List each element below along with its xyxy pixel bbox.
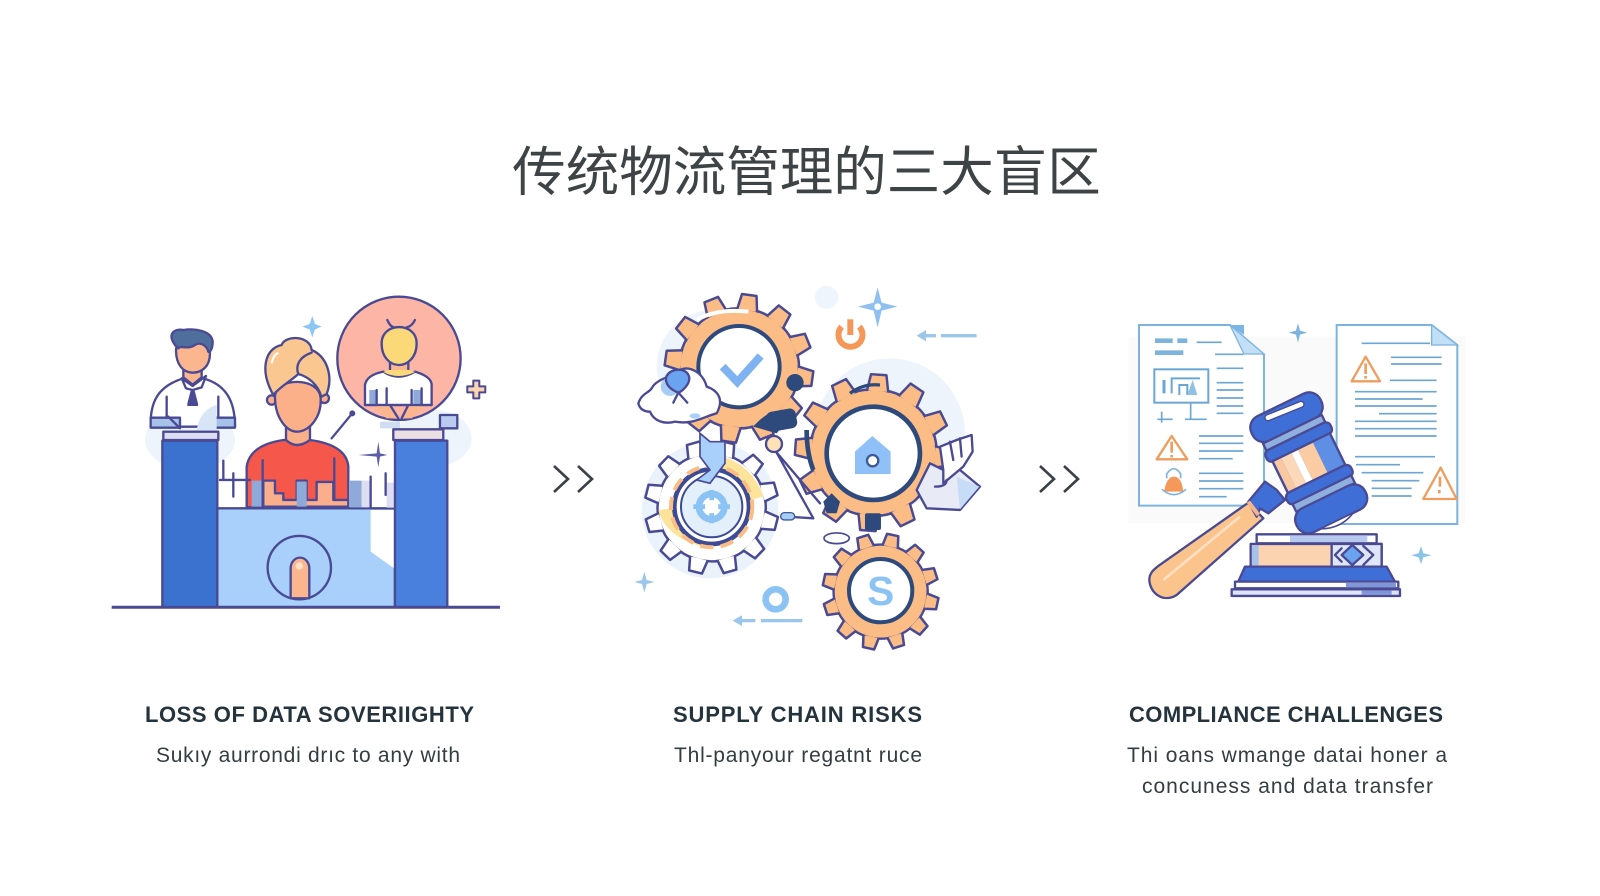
icon: left document [1139,325,1264,506]
icon: power symbol [838,319,862,347]
icon: sparkle large [858,287,897,327]
arrow: first double chevron [554,466,592,492]
title: 传统物流管理的三大盲区 [512,144,1101,202]
text: description three [1127,744,1447,798]
icon: antenna [332,410,355,438]
icon: sparkle dark [358,442,387,467]
icon: sparkle top [1289,323,1307,343]
arrow: top right [917,330,977,341]
icon: ground line [112,603,500,612]
icon: sparkle small [634,572,655,593]
text: description three: Thi oans wmange datai honer a [1127,744,1447,767]
icon: hand [917,435,980,510]
icon: right document [1337,325,1457,524]
icon: pillar cap right [380,415,457,440]
icon: sparkle bottom [1411,546,1432,564]
icon: cloud with balloon [638,369,720,423]
icon: left man [151,329,235,430]
icon: gear with dollar [812,523,949,660]
icon: gavel base [1232,534,1400,596]
heading: loss of data sovereignty: LOSS OF DATA SOVERIIGHTY [145,702,474,727]
heading: compliance challenges: COMPLIANCE CHALLENGES [1129,702,1443,727]
heading: supply chain risks: SUPPLY CHAIN RISKS [673,702,922,727]
icon: central woman [220,338,395,508]
icon: plus orange [467,381,485,398]
icon: gear with house [790,369,957,536]
icon: connectors [765,408,849,544]
icon: gear with gear symbol [631,427,792,588]
icon: gear with check [655,285,823,452]
text: description two: Thl-panyour regatnt ruce [674,744,922,767]
arrow: second double chevron [1040,466,1078,492]
panel: compliance challenges illustration [1128,323,1465,598]
icon: ring [766,589,786,609]
icon: portrait circle [337,297,461,420]
icon: sparkle blue [302,316,322,337]
arrow: bottom [733,615,802,626]
icon: right pillar [395,441,447,607]
panel: supply chain risks illustration [631,285,980,660]
panel: loss of data sovereignty illustration [112,297,500,607]
icon: gavel handle [1149,482,1285,598]
icon: dollar sign: S [867,568,894,614]
text: description one: Sukıy aurrondi drıc to any with [156,744,460,767]
icon: central box with keyhole [217,508,395,607]
icon: gavel head [1246,388,1373,542]
icon: left pillar [162,441,217,607]
text: description three: concuness and data transfer [1142,775,1433,798]
